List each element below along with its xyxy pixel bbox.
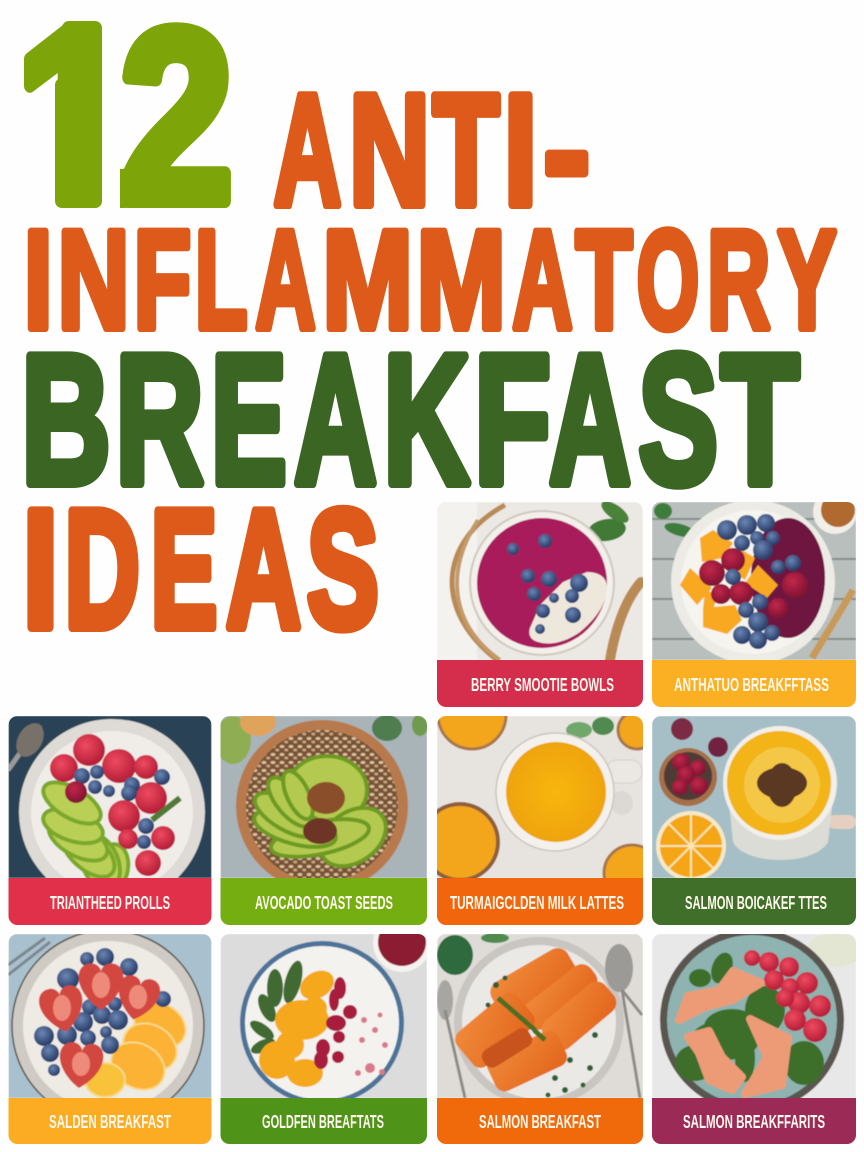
label bar: BERRY SMOOTIE BOWLS xyxy=(471,675,614,695)
title line: INFLAMMATORY: M xyxy=(417,201,506,358)
label bar: SALDEN BREAKFAST xyxy=(49,1112,171,1132)
title line: IDEAS: A xyxy=(226,475,301,663)
title line: BREAKFAST: A xyxy=(549,316,631,522)
title line: BREAKFAST: F xyxy=(474,316,551,522)
label bar xyxy=(652,1098,856,1144)
title line: INFLAMMATORY: A xyxy=(255,201,316,358)
card: turmeric golden milk lattes xyxy=(437,716,643,925)
title xyxy=(16,0,836,663)
title line: BREAKFAST: R xyxy=(115,316,204,522)
photo: strawberries, blueberries and orange plate xyxy=(8,934,212,1098)
photo: berries and avocado plate xyxy=(8,716,212,878)
title line: ANTI-: T xyxy=(433,62,499,238)
label bar: TRIANTHEED PROLLS xyxy=(50,893,170,913)
label bar: SALMON BREAKFAST xyxy=(479,1112,601,1132)
photo: golden milk cups xyxy=(437,716,643,878)
title line: INFLAMMATORY: A xyxy=(512,201,573,358)
title line: IDEAS: S xyxy=(307,475,379,663)
label bar xyxy=(8,878,212,925)
photo: salmon, greens and red berries bowl xyxy=(652,934,856,1098)
title line: ANTI-: A xyxy=(274,62,341,238)
label bar xyxy=(437,660,643,707)
title line: INFLAMMATORY: M xyxy=(322,201,413,358)
title line: INFLAMMATORY: R xyxy=(707,201,770,358)
photo: smoothie bowl xyxy=(437,497,643,660)
title line: BREAKFAST: T xyxy=(721,316,799,522)
title line: BREAKFAST: S xyxy=(638,316,718,522)
title line: BREAKFAST: A xyxy=(294,316,377,522)
title line: ANTI-: - xyxy=(543,62,590,238)
card: avocado toast seeds xyxy=(215,708,428,925)
title line: IDEAS: D xyxy=(64,475,140,663)
photo: salmon fillets xyxy=(437,933,643,1107)
title line: BREAKFAST: K xyxy=(383,316,470,522)
title line: IDEAS: E xyxy=(151,475,217,663)
title line: INFLAMMATORY: T xyxy=(576,201,632,358)
label bar xyxy=(8,1098,212,1144)
title line: ANTI-: N xyxy=(349,62,430,238)
title line: ANTI-: I xyxy=(504,62,537,238)
label bar xyxy=(437,878,643,925)
title line: INFLAMMATORY: N xyxy=(58,201,129,358)
title line: INFLAMMATORY: O xyxy=(637,201,699,358)
card: golden breatats xyxy=(220,934,427,1144)
label bar xyxy=(652,660,856,707)
label bar xyxy=(220,1098,427,1144)
title line: BREAKFAST: B xyxy=(21,316,111,522)
card: salmon breakfast xyxy=(437,933,643,1144)
photo: fruit bowl xyxy=(652,490,857,664)
label bar xyxy=(437,1098,643,1144)
label bar: TURMAIGCLDEN MILK LATTES xyxy=(450,893,624,913)
card: salden breakfast xyxy=(8,930,212,1144)
label bar: AVOCADO TOAST SEEDS xyxy=(255,893,393,913)
photo: avocado on seeded toast xyxy=(220,716,427,878)
title line: IDEAS: I xyxy=(23,475,58,663)
card: berry smoothie bowls xyxy=(437,497,643,707)
card: anthatuo breakfftass xyxy=(652,490,857,707)
card: salmon breakffarits xyxy=(652,928,863,1144)
card: triantheed prolls xyxy=(8,716,212,925)
photo: golden fruit on a blue rim plate xyxy=(220,934,427,1098)
label bar: GOLDFEN BREAFTATS xyxy=(262,1112,384,1132)
label bar xyxy=(220,878,427,925)
title line: INFLAMMATORY: I xyxy=(24,201,53,358)
title line: BREAKFAST: E xyxy=(211,316,287,522)
label bar xyxy=(652,878,856,925)
card: salmon boicakef ttes xyxy=(652,716,856,925)
title line: INFLAMMATORY: F xyxy=(134,201,191,358)
photo: golden soup mug with orange xyxy=(652,716,856,881)
title line: INFLAMMATORY: L xyxy=(195,201,247,358)
